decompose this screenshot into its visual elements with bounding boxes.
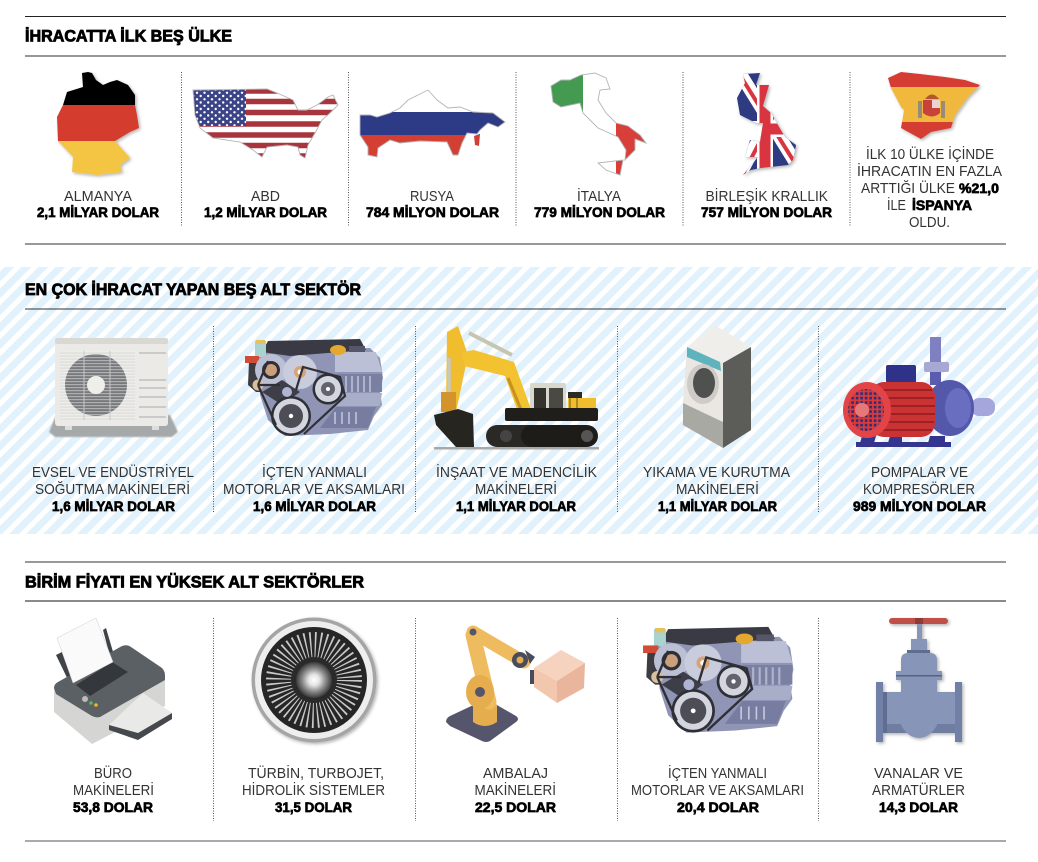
heading: highest unit price: BİRİM FİYATI EN YÜKSEK ALT SEKTÖRLER: [25, 572, 364, 592]
hatched band background: [0, 267, 1038, 534]
label: Germany: ALMANYA: [64, 189, 132, 205]
label: USA: [204, 189, 327, 220]
text: Spain note: %21,0: [959, 180, 999, 196]
section: top five countries: [25, 16, 1006, 244]
label: cooling machines: 1,6 MİLYAR DOLAR: [52, 498, 175, 514]
label: combustion engines: İÇTEN YANMALI: [262, 463, 367, 481]
label: Russia: 784 MİLYON DOLAR: [366, 204, 499, 220]
label: construction machines: 1,1 MİLYAR DOLAR: [456, 498, 576, 514]
label: washing machines: 1,1 MİLYAR DOLAR: [658, 498, 777, 514]
label: combustion engines: [223, 463, 405, 514]
label: combustion engines: 20,4 DOLAR: [677, 799, 759, 815]
icon: Italy flag map: [550, 72, 648, 176]
section: top five sub-sectors: [25, 280, 1006, 514]
heading: top five countries: İHRACATTA İLK BEŞ ÜLKE: [25, 26, 232, 46]
icon: Russia flag map: [355, 88, 510, 159]
icon: air conditioner: [49, 338, 178, 437]
icon: excavator: [434, 326, 599, 450]
label: office machines: MAKİNELERİ: [73, 781, 154, 799]
label: washing machines: [643, 465, 790, 514]
label: combustion engines: MOTORLAR VE AKSAMLARI: [631, 783, 804, 799]
label: USA: 1,2 MİLYAR DOLAR: [204, 204, 327, 220]
label: turbines: HİDROLİK SİSTEMLER: [242, 781, 385, 799]
label: packaging machines: MAKİNELERİ: [474, 781, 556, 799]
text: Spain note: İLE: [887, 196, 906, 214]
icon: valve: [876, 618, 962, 742]
label: turbines: [242, 764, 385, 815]
label: combustion engines: MOTORLAR VE AKSAMLARI: [223, 482, 405, 498]
icon: pump: [843, 337, 995, 447]
icon: printer: [54, 618, 172, 744]
label: pumps and compressors: [853, 465, 986, 514]
label: Italy: 779 MİLYON DOLAR: [534, 204, 665, 220]
heading: top export sub-sectors: EN ÇOK İHRACAT YAPAN BEŞ ALT SEKTÖR: [25, 280, 361, 299]
label: valves: ARMATÜRLER: [872, 781, 965, 799]
label: turbines: 31,5 DOLAR: [275, 799, 352, 815]
label: construction machines: İNŞAAT VE MADENCİLİK: [436, 463, 597, 481]
label: valves: 14,3 DOLAR: [879, 799, 958, 815]
label: pumps and compressors: 989 MİLYON DOLAR: [853, 498, 986, 514]
icon: United Kingdom flag map: [735, 70, 800, 178]
label: washing machines: MAKİNELERİ: [676, 480, 759, 498]
label: Russia: RUSYA: [410, 189, 454, 205]
icon: washing machine: [683, 325, 751, 448]
label: United Kingdom: 757 MİLYON DOLAR: [701, 204, 832, 220]
label: packaging machines: [474, 766, 556, 815]
label: packaging machines: AMBALAJ: [483, 766, 548, 782]
text: Spain note: İSPANYA: [912, 197, 972, 213]
label: pumps and compressors: POMPALAR VE: [871, 465, 968, 481]
label: valves: VANALAR VE: [874, 766, 963, 782]
label: Russia: [366, 189, 499, 220]
label: cooling machines: EVSEL VE ENDÜSTRİYEL: [32, 463, 194, 481]
label: United Kingdom: BİRLEŞİK KRALLIK: [706, 187, 828, 205]
text: Spain note: [857, 145, 1002, 231]
label: USA: ABD: [251, 189, 280, 205]
icon: Germany flag map: [56, 72, 142, 178]
label: combustion engines: İÇTEN YANMALI: [668, 764, 767, 782]
label: Italy: [534, 187, 665, 220]
label: cooling machines: SOĞUTMA MAKİNELERİ: [35, 480, 190, 498]
text: Spain note: İHRACATIN EN FAZLA: [857, 162, 1002, 180]
label: construction machines: [436, 463, 597, 514]
label: pumps and compressors: KOMPRESÖRLER: [863, 480, 975, 498]
label: Germany: 2,1 MİLYAR DOLAR: [37, 204, 159, 220]
label: cooling machines: [32, 463, 194, 514]
label: combustion engines: [631, 764, 804, 815]
label: combustion engines: 1,6 MİLYAR DOLAR: [253, 498, 376, 514]
icon: engine: [643, 627, 793, 733]
label: office machines: 53,8 DOLAR: [73, 799, 153, 815]
label: office machines: [73, 764, 154, 815]
label: packaging machines: 22,5 DOLAR: [475, 799, 556, 815]
icon: USA flag map: [190, 88, 340, 162]
label: valves: [872, 766, 965, 815]
label: washing machines: YIKAMA VE KURUTMA: [643, 465, 790, 481]
text: Spain note: OLDU.: [909, 215, 950, 231]
text: Spain note: ARTTIĞI ÜLKE: [861, 179, 955, 197]
icon: Spain flag map: [885, 70, 985, 142]
section: highest unit price sub-sectors: [25, 562, 1006, 841]
text: Spain note: İLK 10 ÜLKE İÇİNDE: [866, 145, 994, 163]
icon: engine: [245, 339, 383, 436]
label: office machines: BÜRO: [94, 764, 132, 782]
icon: turbine: [252, 618, 376, 742]
label: construction machines: MAKİNELERİ: [475, 480, 557, 498]
label: turbines: TÜRBİN, TURBOJET,: [248, 764, 384, 782]
label: Italy: İTALYA: [577, 187, 621, 205]
label: United Kingdom: [701, 187, 832, 220]
label: Germany: [37, 189, 159, 220]
icon: robot arm with box: [446, 628, 585, 742]
